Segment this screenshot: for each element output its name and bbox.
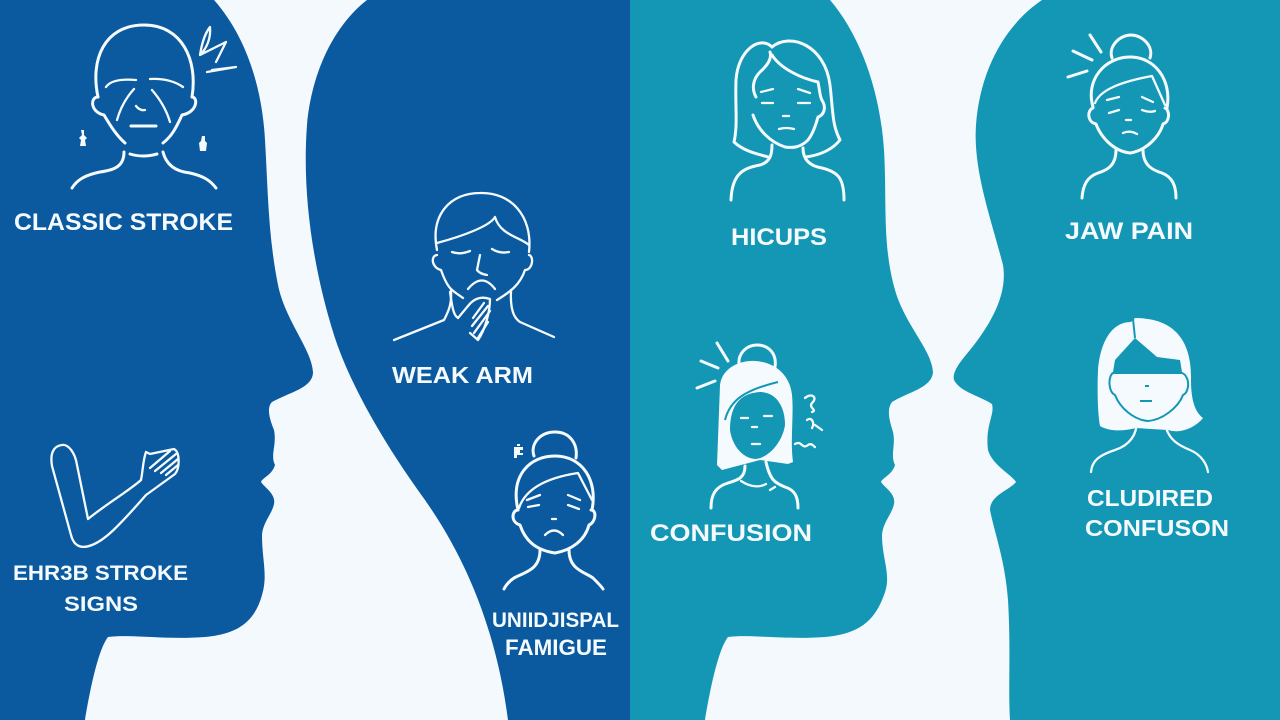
icon: classic stroke face bbox=[72, 25, 236, 188]
panel: center blue head silhouette bbox=[306, 0, 630, 720]
panel: right teal head silhouette facing left bbox=[954, 0, 1280, 720]
icon: confusion woman bbox=[697, 343, 822, 508]
label: ehr stroke signs: EHR3B STROKE bbox=[13, 561, 188, 585]
label: weak arm: WEAK ARM bbox=[392, 362, 533, 388]
icon: jaw pain woman with bun bbox=[1068, 35, 1176, 198]
label: jaw pain: JAW PAIN bbox=[1065, 218, 1193, 245]
icon: clouded confusion woman with blindfold hair bbox=[1091, 318, 1208, 472]
label: universal fatigue bbox=[492, 609, 619, 660]
label: confusion: CONFUSION bbox=[650, 520, 812, 547]
label: hicups: HICUPS bbox=[731, 224, 827, 251]
icon: universal fatigue face with bun bbox=[504, 432, 603, 589]
panel: teal head silhouette facing right bbox=[630, 0, 933, 720]
icon: bent arm with raised hand bbox=[51, 445, 179, 547]
label: universal fatigue: FAMIGUE bbox=[505, 635, 607, 660]
label: clouded confusion bbox=[1085, 485, 1229, 541]
label: classic stroke: CLASSIC STROKE bbox=[14, 209, 233, 236]
label: clouded confusion: CLUDIRED bbox=[1087, 485, 1213, 511]
icon: weak arm face with hand on chin bbox=[394, 193, 554, 340]
label: ehr stroke signs: SIGNS bbox=[64, 592, 138, 616]
label: universal fatigue: UNIIDJISPAL bbox=[492, 609, 619, 632]
label: ehr stroke signs bbox=[13, 561, 188, 616]
panel: left blue head silhouette bbox=[0, 0, 313, 720]
label: clouded confusion: CONFUSON bbox=[1085, 515, 1229, 541]
icon: hiccups woman bbox=[731, 41, 844, 200]
